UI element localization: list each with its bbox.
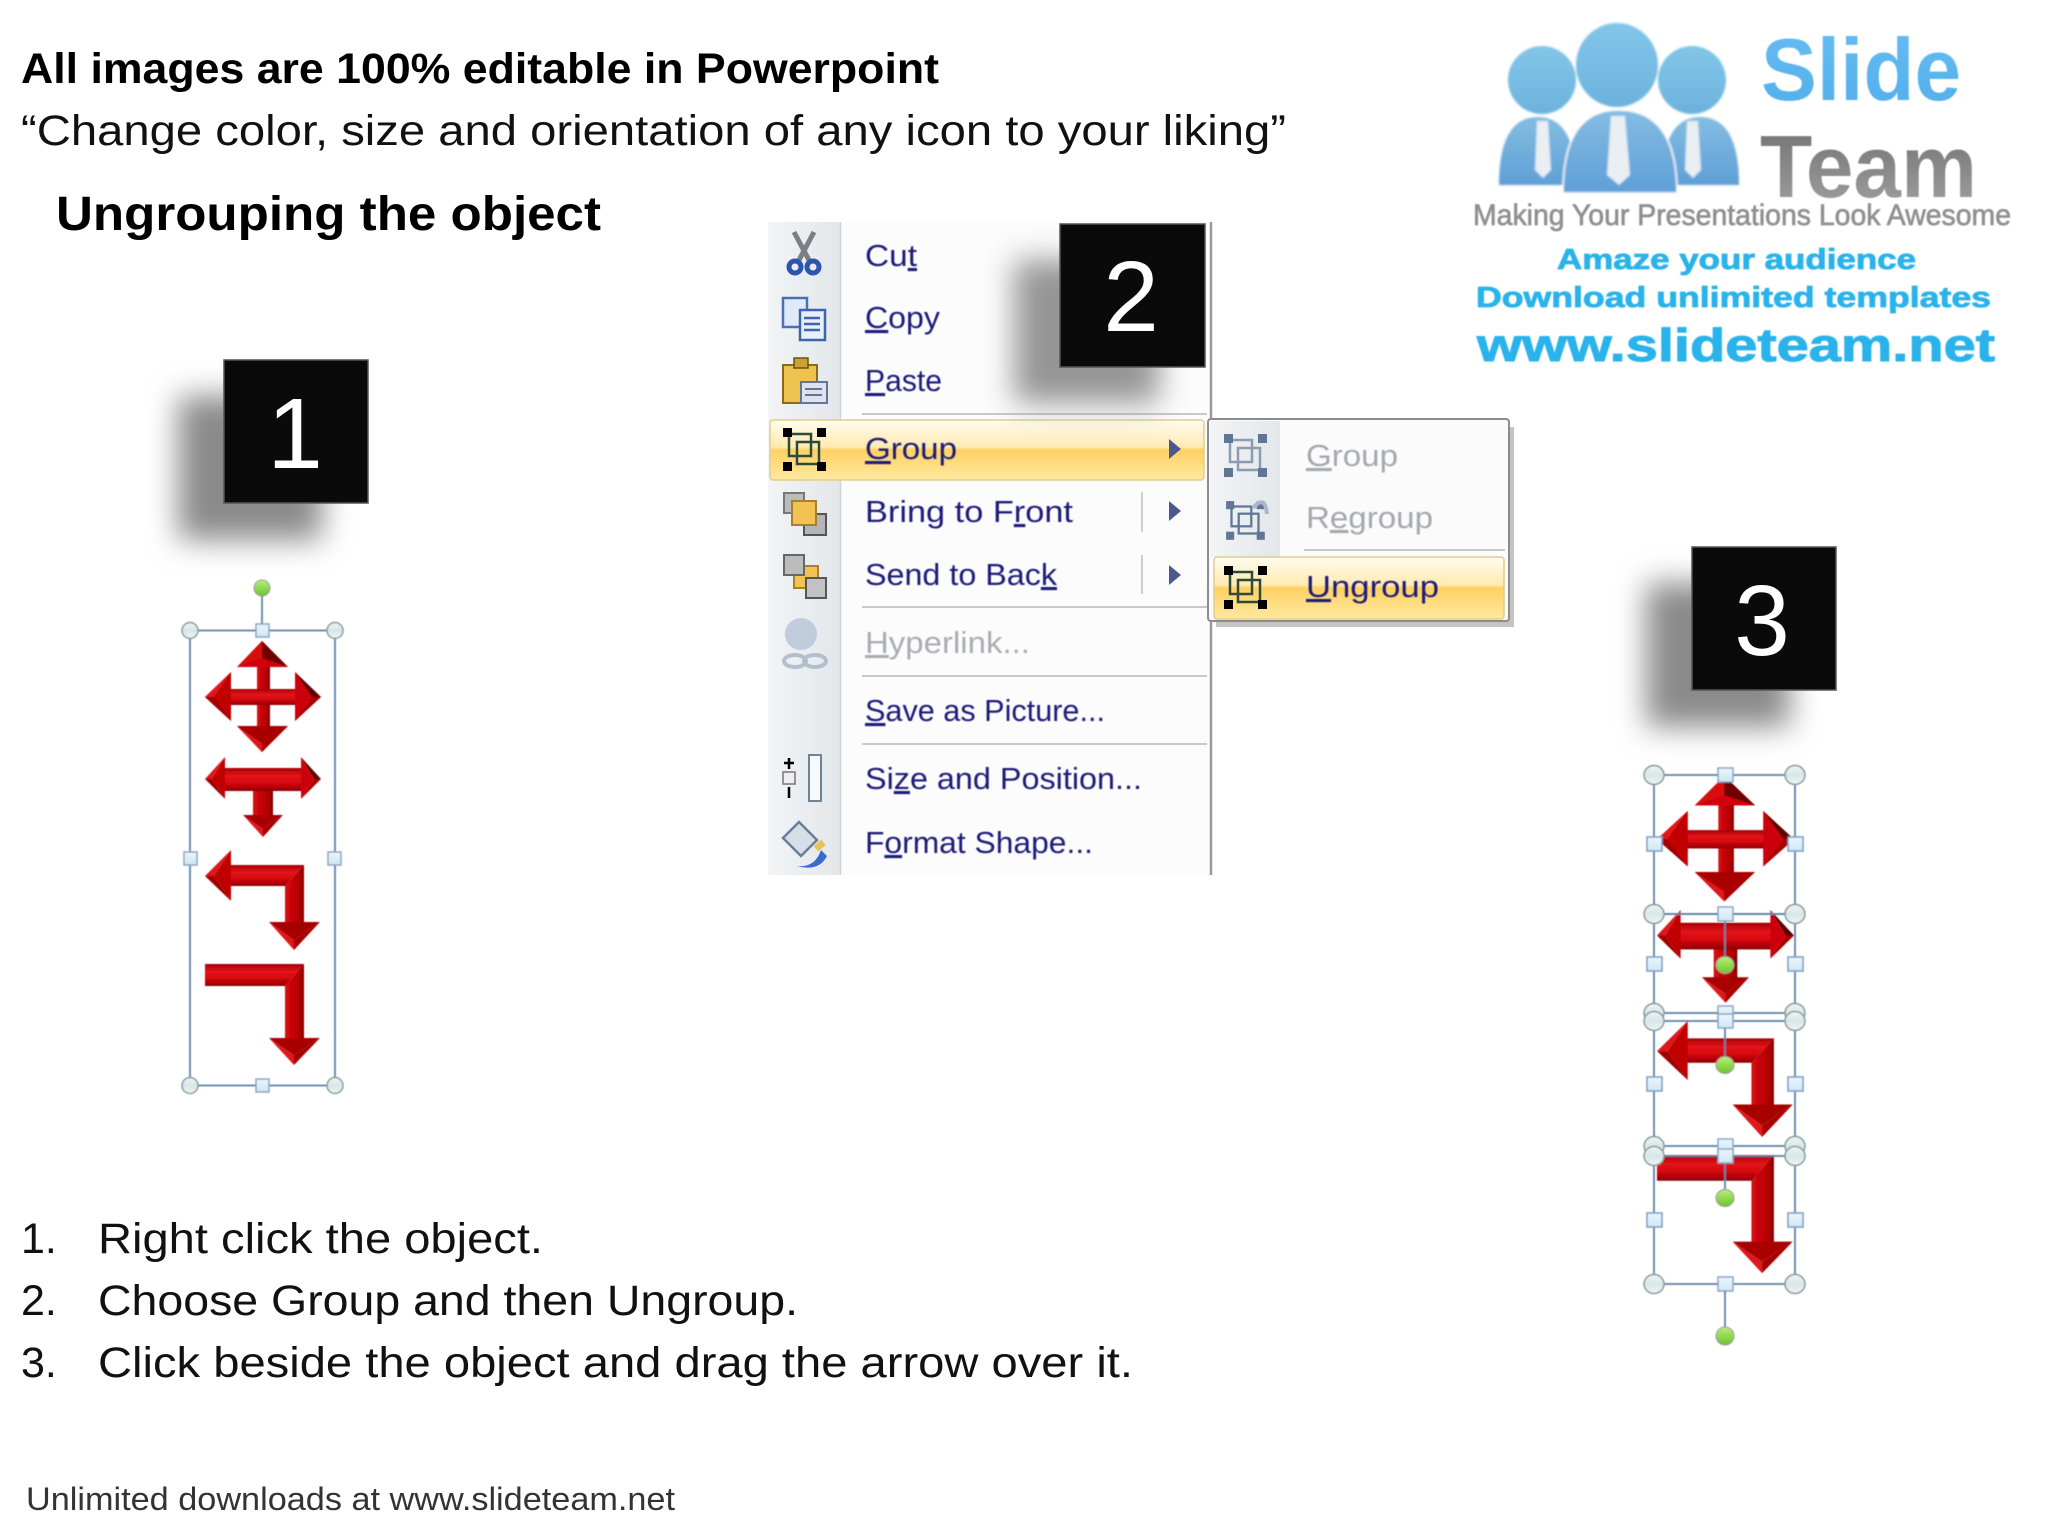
logo promo text: Download unlimited templates [1476,282,1991,314]
menu item labels: Bring to F ront [865,494,1073,529]
logo promo text [1476,244,1995,371]
icon: group [783,428,826,471]
arrow: four way, ungrouped [1657,776,1794,901]
badge: step 1: 1 [267,378,323,490]
arrow: corner down, ungrouped [1657,1155,1793,1273]
logo wordmark: Making Your Presentations Look Awesome [1473,199,2011,232]
menu item labels: Cut [865,238,917,273]
icon: scissors [789,232,819,273]
highlighted ungroup row [1214,557,1504,619]
ungrouped red arrows with selection frames [1644,766,1805,1345]
submenu labels: Group [1306,438,1398,473]
icon: format shape [783,822,827,868]
header text: editable note [21,45,1286,155]
grouped red arrows with selection frame [182,580,343,1094]
menu item labels: Format Shape... [865,825,1093,860]
menu item labels: Copy [865,300,941,335]
arrow: left and down [205,850,320,950]
selection frame: left and down [1644,1004,1805,1146]
badge: step 1 [178,360,368,540]
logo: slide team [1473,20,2011,371]
submenu shadow [1216,427,1514,627]
submenu arrows and splitters [1142,439,1181,594]
submenu labels [1306,438,1439,604]
menu item labels: Size and Position... [865,761,1142,796]
step 1 text: 1. [21,1215,57,1263]
icon: copy [783,298,825,340]
submenu panel [1208,419,1509,621]
icon: paste [783,358,827,403]
icon: regroup disabled [1226,501,1267,540]
logo wordmark: Slide [1761,20,1961,119]
menu item labels: Save as Picture... [865,693,1105,728]
badge: step 3 [1646,547,1836,727]
selection frame [182,580,343,1094]
icon: send to back [784,555,826,598]
icon: ungroup [1224,566,1267,609]
quoted note line: “Change color, size and orientation of any icon to your liking” [21,107,1286,155]
icon: group disabled [1224,434,1267,477]
logo promo text: Amaze your audience [1557,244,1916,276]
context menu [768,222,1211,875]
arrow: three way [205,757,321,837]
menu separators [862,414,1207,744]
step 2 text: Choose Group and then Ungroup. [98,1277,798,1325]
logo people [1499,23,1739,193]
badge: step 2: 2 [1103,241,1159,353]
menu item labels: Paste [865,363,942,398]
logo wordmark: Team [1760,117,1977,216]
arrow: three way, ungrouped [1657,910,1794,1003]
selection frame: four way [1644,766,1805,914]
step 3 text: Click beside the object and drag the arrow over it. [98,1339,1133,1387]
selection frame: corner down [1644,1136,1805,1345]
menu item labels: Hyperlink... [865,625,1030,660]
icon: bring to front [784,493,826,535]
badge: step 3: 3 [1734,565,1790,677]
menu item labels: Send to Back [865,557,1058,592]
logo promo text: www.slideteam.net [1476,319,1995,371]
heading: ungrouping the object: Ungrouping the object [56,188,601,241]
step 1 text: Right click the object. [98,1215,543,1263]
step 3 text: 3. [21,1339,57,1387]
menu gutter [768,222,840,875]
submenu [1208,419,1514,627]
menu background [768,222,1211,875]
arrow: left and down, ungrouped [1657,1021,1793,1137]
footer: downloads note: Unlimited downloads at www.slideteam.net [26,1481,675,1517]
menu item labels: Group [865,431,957,466]
badge: step 2 [1014,224,1205,403]
logo wordmark [1473,20,2011,232]
bold note line: All images are 100% editable in Powerpoint [21,45,939,93]
arrow: corner down [205,964,320,1065]
numbered steps [21,1215,1133,1387]
arrow: four way [205,641,321,752]
highlighted item background [770,420,1204,480]
menu item labels [865,238,1142,860]
submenu labels: Regroup [1306,500,1433,535]
selection frame: three way [1644,904,1805,1013]
step 2 text: 2. [21,1277,57,1325]
icon: hyperlink [784,618,826,667]
submenu labels: Ungroup [1306,569,1439,604]
icon: size and position [783,755,821,801]
